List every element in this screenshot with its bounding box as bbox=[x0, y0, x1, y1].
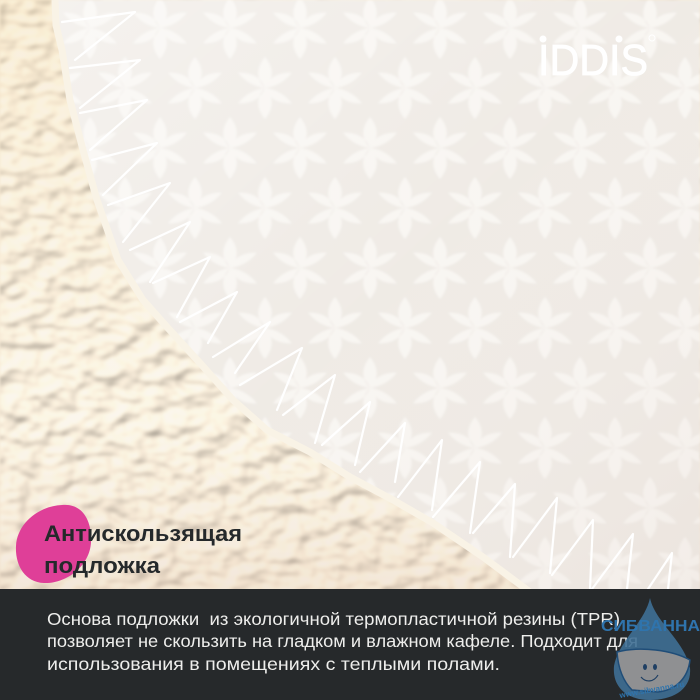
description text: позволяет не скользить на гладком и влажном кафеле. Подходит для bbox=[47, 631, 638, 651]
overlock stitches bbox=[62, 12, 672, 589]
watermark: sibvanna bbox=[601, 598, 700, 700]
dark text band bbox=[0, 589, 700, 700]
bath face bbox=[641, 664, 658, 681]
heading bbox=[44, 521, 242, 578]
description text: использования в помещениях с теплыми полами. bbox=[47, 654, 500, 674]
watermark url: www.sibvanna.ru bbox=[618, 680, 685, 700]
bathtub bbox=[617, 649, 690, 692]
watermark wordmark: СИБВАННА bbox=[601, 618, 700, 635]
description text bbox=[47, 609, 638, 674]
water drop bbox=[614, 598, 690, 700]
brand logo: iddis: IDDIS bbox=[538, 36, 648, 85]
description text: Основа подложки из экологичной термопластичной резины (TPR) bbox=[47, 609, 620, 629]
heading: подложка bbox=[44, 553, 161, 578]
rubber backing mat bbox=[55, 0, 700, 592]
heading: Антискользящая bbox=[44, 521, 242, 546]
decorative pink blob bbox=[16, 505, 91, 583]
